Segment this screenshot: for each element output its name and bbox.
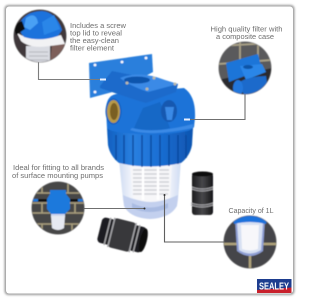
brass inlet bbox=[106, 98, 122, 124]
text: composite case: a composite case bbox=[216, 32, 274, 41]
inset: surface pumps bbox=[31, 181, 85, 235]
callout line: screw top lid bbox=[38, 62, 105, 80]
right connector bbox=[191, 172, 213, 215]
filter element bbox=[130, 163, 172, 202]
text: screw top lid: top lid to reveal bbox=[70, 28, 122, 38]
text: composite case: High quality filter with bbox=[210, 24, 282, 34]
text: screw top lid: filter element bbox=[70, 44, 115, 52]
left connector bbox=[96, 215, 150, 256]
callout dots bbox=[100, 78, 190, 210]
text: surface pumps bbox=[12, 163, 104, 180]
inset: screw top lid bbox=[13, 9, 67, 63]
bowl cap bbox=[107, 128, 193, 167]
text: surface pumps: of surface mounting pumps bbox=[12, 171, 103, 180]
logo: SEALEY bbox=[257, 279, 292, 293]
text: surface pumps: Ideal for fitting to all brands bbox=[13, 163, 104, 172]
inset: composite case bbox=[218, 41, 272, 96]
callout line: capacity bbox=[164, 195, 224, 242]
text: composite case bbox=[210, 24, 282, 41]
text: screw top lid: the easy-clean bbox=[70, 36, 119, 45]
inset: capacity bbox=[223, 215, 277, 269]
mounting bracket bbox=[89, 54, 178, 103]
text: screw top lid bbox=[70, 21, 126, 52]
callout line: composite case bbox=[185, 94, 245, 120]
callout line: surface pumps bbox=[84, 208, 145, 210]
clear bowl bbox=[119, 160, 181, 219]
logo: SEALEY: SEALEY bbox=[259, 280, 289, 292]
text: screw top lid: Includes a screw bbox=[70, 21, 126, 30]
filter head bbox=[106, 88, 195, 134]
product: water filter bbox=[89, 54, 213, 256]
text: capacity: Capacity of 1L bbox=[228, 206, 274, 215]
